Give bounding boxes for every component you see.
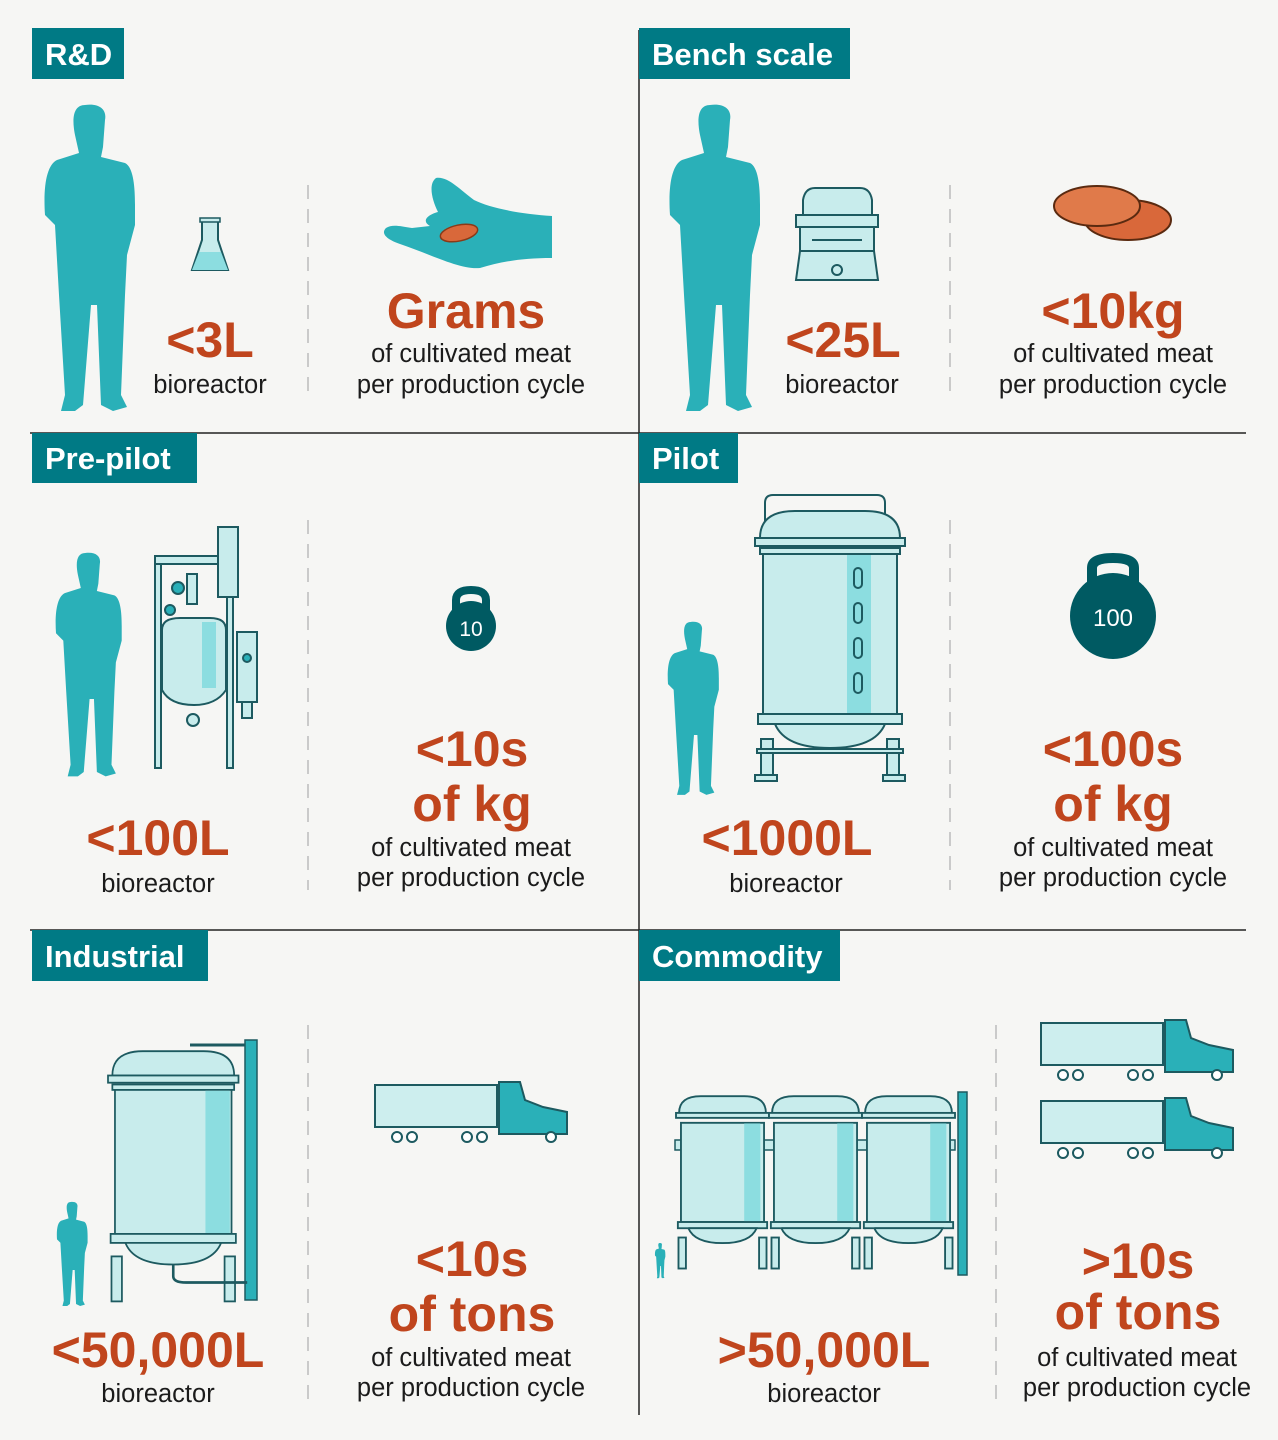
icon: person bench <box>670 105 760 411</box>
text: <10s of tons: per production cycle <box>357 1374 585 1402</box>
header: R&D: R&D <box>45 37 112 72</box>
text: <100s of kg: of cultivated meat <box>1013 834 1213 862</box>
icon: kettlebell 10: 10 <box>459 618 483 641</box>
header: Bench scale <box>639 28 850 79</box>
text: <100s of kg: of kg <box>1053 776 1173 832</box>
text: Grams: per production cycle <box>357 371 585 399</box>
text: Grams: of cultivated meat <box>371 340 571 368</box>
text: <3L bioreactor: bioreactor <box>153 371 267 399</box>
text: >10s of tons <box>1023 1233 1251 1402</box>
text: <100s of kg: per production cycle <box>999 864 1227 892</box>
icon: kettlebell 10 <box>446 590 496 651</box>
text: Grams: Grams <box>387 283 545 339</box>
icon: pre-pilot apparatus <box>155 527 257 768</box>
text: <10s of tons: of tons <box>389 1286 555 1342</box>
text: >10s of tons: >10s <box>1082 1233 1194 1289</box>
icon: industrial tank <box>108 1040 257 1301</box>
text: <10s of kg: of kg <box>412 776 532 832</box>
header: Bench scale: Bench scale <box>652 37 833 72</box>
icon: person industrial <box>57 1202 88 1306</box>
text: <10kg: per production cycle <box>999 371 1227 399</box>
text: <100L bioreactor <box>86 810 230 898</box>
text: <10s of tons: of cultivated meat <box>371 1344 571 1372</box>
text: <10kg: <10kg <box>1041 283 1185 339</box>
text: <1000L bioreactor <box>702 810 872 898</box>
icon: flask <box>192 218 228 270</box>
header: Industrial <box>32 930 208 981</box>
text: <10s of kg: of cultivated meat <box>371 834 571 862</box>
icon: kettlebell 100 <box>1070 558 1156 659</box>
header: Industrial: Industrial <box>45 939 185 974</box>
icon: person pre-pilot <box>56 553 122 776</box>
text: <10s of kg <box>357 721 585 892</box>
icon: bench bioreactor <box>796 188 878 280</box>
header: Pilot: Pilot <box>652 441 719 476</box>
text: <1000L bioreactor: <1000L <box>702 810 872 866</box>
header: Pre-pilot: Pre-pilot <box>45 441 171 476</box>
text: <100s of kg <box>999 721 1227 892</box>
text: >50,000L bioreactor <box>718 1322 930 1408</box>
icon: pilot tank <box>755 495 905 781</box>
header: Commodity: Commodity <box>652 939 823 974</box>
icon: person pilot <box>668 622 719 795</box>
text: <50,000L bioreactor: bioreactor <box>101 1380 215 1408</box>
header: Commodity <box>639 930 840 981</box>
text: <100L bioreactor: bioreactor <box>101 870 215 898</box>
text: >10s of tons: of cultivated meat <box>1037 1344 1237 1372</box>
text: <10s of tons: <10s <box>416 1231 528 1287</box>
text: <50,000L bioreactor: <50,000L <box>52 1322 264 1378</box>
text: <100L bioreactor: <100L <box>86 810 230 866</box>
text: <10s of kg: per production cycle <box>357 864 585 892</box>
icon: patties <box>1054 186 1171 240</box>
text: >50,000L bioreactor: bioreactor <box>767 1380 881 1408</box>
text: >10s of tons: per production cycle <box>1023 1374 1251 1402</box>
header: R&D <box>32 28 124 79</box>
text: <100s of kg: <100s <box>1043 721 1183 777</box>
icon: three commodity tanks <box>675 1092 967 1275</box>
icon: truck <box>375 1082 567 1142</box>
icon: person commodity <box>655 1243 665 1278</box>
text: <50,000L bioreactor <box>52 1322 264 1408</box>
icon: person R&D <box>44 105 135 411</box>
text: <10s of kg: <10s <box>416 721 528 777</box>
icon: kettlebell 100: 100 <box>1093 605 1133 632</box>
header: Pre-pilot <box>32 433 197 483</box>
text: >10s of tons: of tons <box>1055 1284 1221 1340</box>
icon: gloved hand with meat <box>384 178 552 268</box>
icon: two trucks <box>1041 1020 1233 1158</box>
header: Pilot <box>639 433 738 483</box>
text: >50,000L bioreactor: >50,000L <box>718 1322 930 1378</box>
text: Grams <box>357 283 585 399</box>
text: <25L bioreactor <box>785 312 901 399</box>
text: <3L bioreactor: <3L <box>166 312 254 368</box>
text: <10s of tons <box>357 1231 585 1402</box>
text: <10kg <box>999 283 1227 399</box>
text: <25L bioreactor: bioreactor <box>785 371 899 399</box>
text: <25L bioreactor: <25L <box>785 312 901 368</box>
text: <10kg: of cultivated meat <box>1013 340 1213 368</box>
text: <3L bioreactor <box>153 312 267 399</box>
text: <1000L bioreactor: bioreactor <box>729 870 843 898</box>
